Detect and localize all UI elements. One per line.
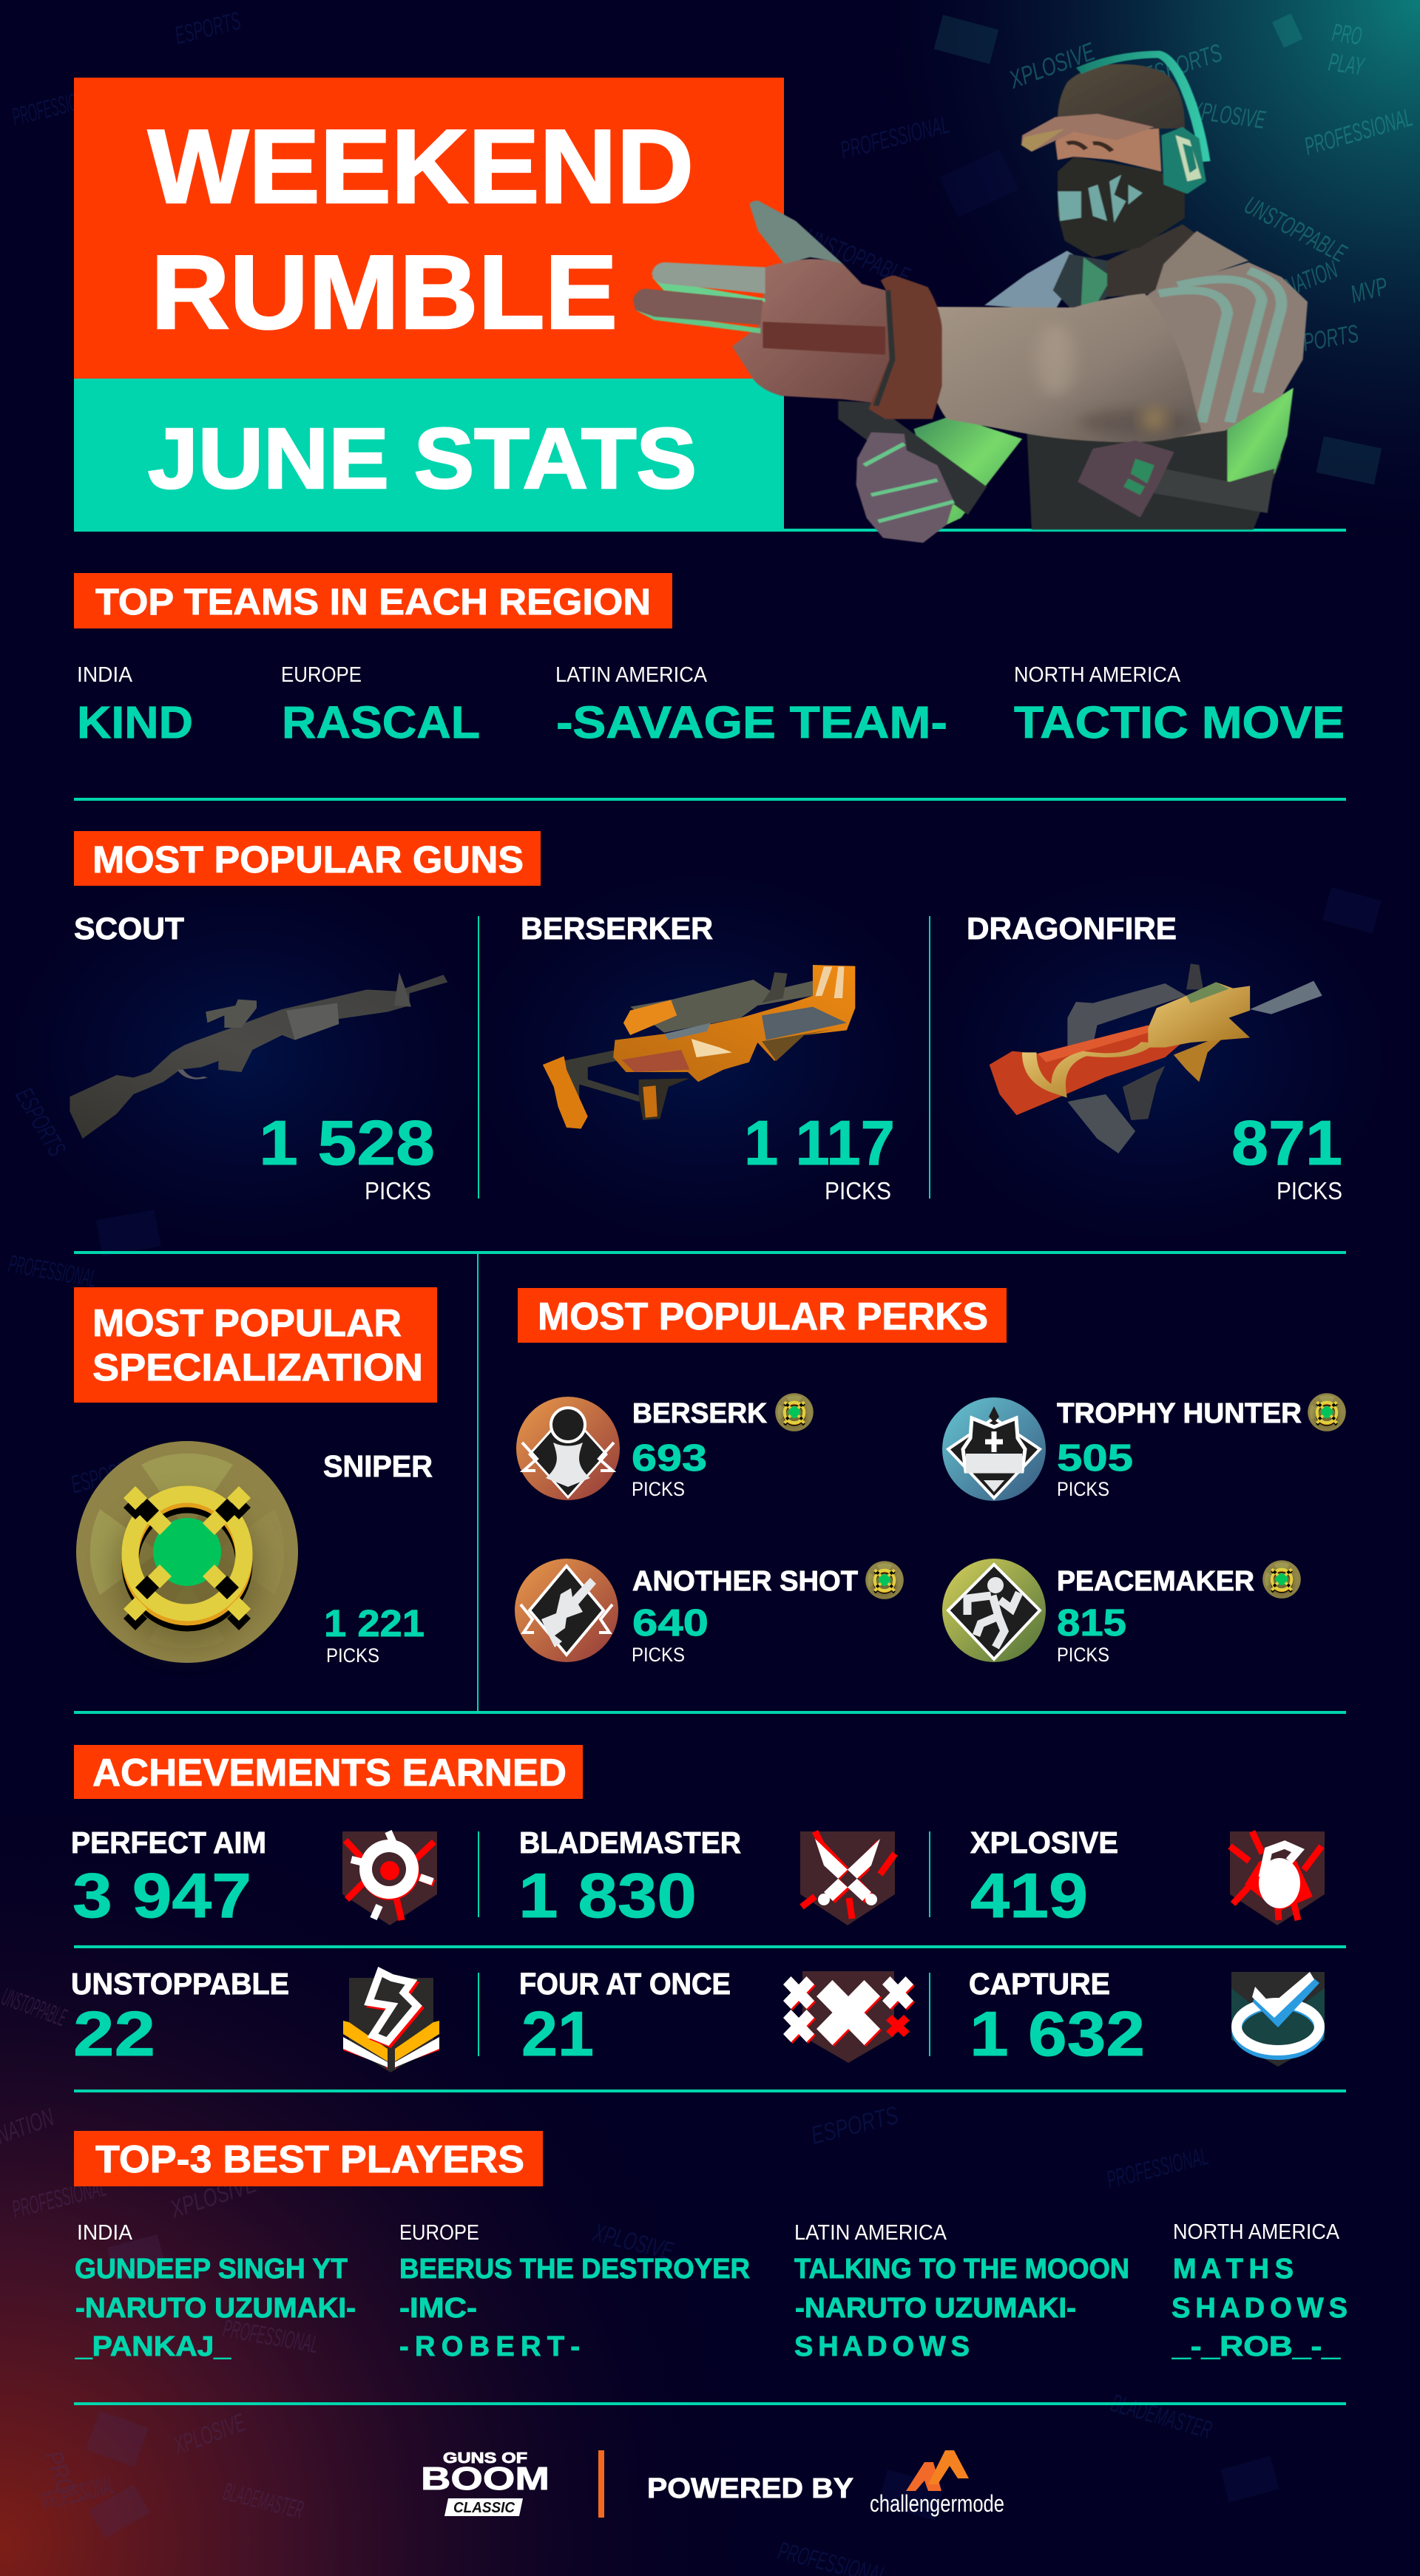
background: ESPORTS (10, 1083, 71, 1162)
players: North America: S H A D O W S (1172, 2293, 1348, 2324)
background: DOMINATION (1245, 255, 1342, 316)
background: MVP (1348, 272, 1391, 309)
perk: another shot: 640 (632, 1601, 709, 1644)
gun panel: dragonfire: 871 (1231, 1108, 1342, 1179)
title: weekend rumble (148, 108, 694, 351)
achievement: four at once: 21 (521, 1999, 594, 2070)
gun panel: berserker: 1 117 (744, 1108, 895, 1179)
gun panel: dragonfire: DRAGONFIRE (967, 911, 1177, 946)
background: PROFESSIONAL (10, 2173, 109, 2224)
background: MOBILE (1204, 326, 1269, 371)
icon: another shot (515, 1559, 618, 1662)
gun panel: scout: 1 528 (259, 1108, 435, 1179)
achievement: unstoppable (71, 1967, 439, 2072)
achievement: unstoppable: UNSTOPPABLE (71, 1967, 289, 2001)
achievement: xplosive: 419 (970, 1861, 1088, 1931)
players: India (75, 2221, 356, 2362)
gun panel: scout (70, 911, 447, 1204)
perk: trophy hunter: TROPHY HUNTER (1057, 1398, 1302, 1429)
achievement: four at once (519, 1967, 915, 2070)
background: BLADEMASTER (220, 2478, 306, 2524)
achievement: capture: CAPTURE (969, 1967, 1110, 2001)
background: XPLOSIVE (1005, 38, 1099, 95)
background: UNSTOPPABLE (1240, 191, 1351, 268)
section heading: most popular guns: MOST POPULAR GUNS (92, 838, 524, 881)
background: XPLOSIVE (1189, 96, 1267, 135)
perk: peacemaker: PEACEMAKER (1057, 1566, 1254, 1597)
panel: most popular specialization: PICKS (326, 1644, 379, 1667)
achievement: xplosive: XPLOSIVE (970, 1826, 1118, 1860)
background: PROFESSIONAL (7, 1250, 98, 1293)
achievement: blademaster (518, 1826, 895, 1931)
perk: peacemaker: PICKS (1057, 1644, 1109, 1666)
background: PROFESSIONAL (221, 2314, 320, 2359)
icon: capture badge (1231, 1972, 1325, 2067)
achievement: capture (969, 1967, 1325, 2070)
perk: trophy hunter (942, 1393, 1346, 1501)
powered by: POWERED BY (647, 2473, 853, 2504)
players: North America: _-_ROB_-_ (1172, 2331, 1341, 2362)
players: Latin America (794, 2221, 1129, 2362)
icon: berserker gun (543, 965, 855, 1129)
players: Latin America: TALKING TO THE MOOON (794, 2254, 1129, 2285)
section heading: specialization: SPECIALIZATION (92, 1346, 423, 1389)
perk: berserk: 693 (632, 1437, 707, 1479)
background: PRO (1331, 18, 1364, 50)
players: North America: M A T H S (1173, 2254, 1294, 2285)
team: India (77, 663, 193, 748)
players: Europe: EUROPE (399, 2221, 479, 2245)
background: PROFESSIONAL (39, 2471, 118, 2516)
achievement: perfect aim: PERFECT AIM (71, 1826, 266, 1860)
background: XPLOSIVE (169, 2409, 249, 2461)
title: weekend rumble: RUMBLE (151, 234, 618, 351)
perk: another shot: PICKS (632, 1644, 685, 1666)
team: India: INDIA (77, 663, 133, 687)
perk: another shot (515, 1559, 904, 1666)
background: UNSTOPPABLE (0, 1983, 70, 2032)
players: Latin America: LATIN AMERICA (794, 2221, 947, 2245)
players: North America (1172, 2220, 1348, 2362)
gun panel: berserker: PICKS (825, 1177, 891, 1204)
panel: most popular specialization: 1 221 (324, 1602, 425, 1644)
achievement: blademaster: BLADEMASTER (519, 1826, 741, 1860)
background: PRO (38, 2447, 81, 2498)
top teams by region (77, 663, 1345, 748)
gun panel: berserker: BERSERKER (521, 911, 713, 946)
team: Latin America (555, 663, 947, 748)
background: PROFESSIONAL (10, 83, 102, 132)
team: North America: TACTIC MOVE (1014, 697, 1345, 748)
team: North America (1014, 663, 1345, 748)
perk: trophy hunter: PICKS (1057, 1478, 1109, 1500)
achievement: capture: 1 632 (970, 1999, 1145, 2070)
achievement: blademaster: 1 830 (518, 1861, 697, 1931)
achievement: perfect aim: 3 947 (72, 1861, 251, 1931)
icon: peacemaker (942, 1559, 1046, 1662)
background: ESPORTS (1279, 319, 1361, 361)
title panel (74, 78, 1346, 532)
panel: most popular specialization: SNIPER (323, 1449, 433, 1483)
perk: another shot: ANOTHER SHOT (632, 1566, 858, 1597)
section heading: top teams: TOP TEAMS IN EACH REGION (95, 581, 651, 623)
icon: sniper badge (865, 1561, 904, 1599)
logo: guns of boom classic: BOOM (421, 2461, 550, 2497)
players: India: -NARUTO UZUMAKI- (75, 2293, 356, 2324)
gun panel: dragonfire (967, 911, 1342, 1204)
icon: blademaster badge (800, 1831, 895, 1925)
perk: berserk: PICKS (632, 1478, 685, 1500)
perk: peacemaker: 815 (1057, 1601, 1126, 1644)
section heading: most popular guns (74, 831, 541, 886)
players: Europe: -IMC- (399, 2293, 477, 2324)
players: Latin America: S H A D O W S (794, 2331, 970, 2362)
team: North America: NORTH AMERICA (1014, 663, 1181, 687)
perk: berserk: BERSERK (632, 1398, 768, 1429)
icon: sniper badge (775, 1393, 814, 1431)
section heading: achievements earned: ACHEVEMENTS EARNED (92, 1752, 567, 1794)
players: India: _PANKAJ_ (75, 2331, 231, 2362)
section heading: specialization (74, 1287, 437, 1403)
background: PROFESSIONAL (1104, 2142, 1211, 2194)
icon: four at once badge (783, 1971, 915, 2063)
players: Europe: - R O B E R T - (399, 2331, 580, 2362)
icon: dragonfire gun (990, 963, 1322, 1153)
players: Europe (399, 2221, 750, 2362)
icon: perfect aim badge (342, 1831, 437, 1925)
gun panel: scout: SCOUT (74, 911, 184, 946)
perk: berserk (516, 1393, 814, 1500)
achievement: perfect aim (71, 1826, 437, 1931)
subtitle: june stats: JUNE STATS (148, 410, 697, 506)
players: Latin America: -NARUTO UZUMAKI- (795, 2293, 1076, 2324)
icon: sniper badge (1262, 1560, 1301, 1599)
background: ESPORTS (68, 1454, 140, 1499)
players: Europe: BEERUS THE DESTROYER (399, 2254, 750, 2285)
team: Europe: RASCAL (282, 697, 480, 748)
team: Latin America: LATIN AMERICA (555, 663, 708, 687)
icon: sniper emblem (76, 1441, 298, 1663)
panel: most popular specialization (74, 1287, 437, 1667)
section heading: most popular perks: MOST POPULAR PERKS (538, 1295, 988, 1338)
background: PLAY (1327, 48, 1367, 81)
perk: peacemaker (942, 1559, 1301, 1666)
background: ESPORTS (808, 2101, 902, 2150)
gun panel: dragonfire: PICKS (1277, 1177, 1342, 1204)
logo: guns of boom classic: CLASSIC (453, 2500, 515, 2516)
team: Europe (281, 663, 480, 748)
icon: scout rifle (70, 972, 447, 1139)
background: XPLOSIVE (589, 2219, 676, 2265)
character illustration (633, 54, 1308, 543)
logo: challengermode (870, 2450, 1004, 2517)
title: weekend rumble: WEEKEND (148, 108, 694, 226)
logo: challengermode: challengermode (870, 2490, 1004, 2517)
team: Europe: EUROPE (281, 663, 362, 687)
background: XPLOSIVE (166, 2169, 260, 2224)
achievement: xplosive (970, 1826, 1325, 1931)
background: DOMINATION (799, 289, 899, 346)
icon: unstoppable badge (343, 1972, 439, 2072)
players: India: INDIA (77, 2221, 133, 2245)
background: BLADEMASTER (1108, 2389, 1215, 2444)
background: ESPORTS (1140, 38, 1225, 91)
team: Latin America: -SAVAGE TEAM- (556, 697, 947, 748)
logo: guns of boom classic (421, 2450, 550, 2516)
achievement: unstoppable: 22 (73, 1999, 155, 2070)
gun panel: berserker (521, 911, 895, 1204)
icon: berserk (516, 1397, 620, 1500)
players: North America: NORTH AMERICA (1173, 2220, 1340, 2244)
section heading: specialization: MOST POPULAR (92, 1302, 402, 1345)
section heading: top-3 best players (74, 2131, 543, 2186)
perk: trophy hunter: 505 (1057, 1437, 1133, 1479)
icon: trophy hunter (942, 1397, 1046, 1501)
gun panel: scout: PICKS (365, 1177, 431, 1204)
section heading: top teams (74, 573, 672, 628)
background: UNSTOPPABLE (800, 223, 913, 291)
achievement: four at once: FOUR AT ONCE (519, 1967, 731, 2001)
players: India: GUNDEEP SINGH YT (75, 2254, 348, 2285)
background: PROFESSIONAL (838, 111, 952, 165)
section heading: top-3 best players: TOP-3 BEST PLAYERS (95, 2138, 524, 2181)
icon: xplosive badge (1230, 1831, 1325, 1925)
team: India: KIND (77, 697, 193, 748)
logo: guns of boom classic: GUNS OF (443, 2450, 527, 2467)
icon: sniper badge (1308, 1393, 1346, 1431)
